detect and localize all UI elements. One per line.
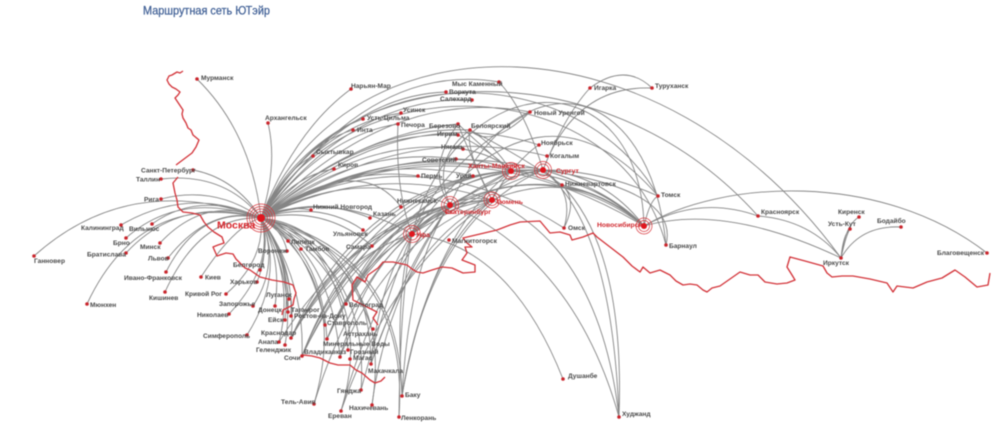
city: Ивано-Франковск bbox=[124, 270, 183, 282]
city: Ленкорань: Ленкорань bbox=[401, 415, 436, 422]
city: Омск: Омск bbox=[568, 225, 586, 232]
city: Киренск bbox=[838, 209, 865, 219]
city: Кишинев: Кишинев bbox=[149, 295, 178, 302]
city: Казань: Казань bbox=[373, 211, 396, 218]
city: Мурманск: Мурманск bbox=[201, 75, 234, 82]
city: Архангельск: Архангельск bbox=[265, 115, 307, 122]
city: Астрахань bbox=[343, 327, 378, 338]
city: Иркутск: Иркутск bbox=[823, 260, 850, 267]
city: Санкт-Петербург: Санкт-Петербург bbox=[141, 166, 196, 174]
city: Таганрог: Таганрог bbox=[291, 307, 320, 314]
city: Таллин: Таллин bbox=[136, 176, 160, 184]
city: Туруханск: Туруханск bbox=[655, 83, 689, 90]
hub: Tyumen bbox=[484, 192, 523, 208]
city: Нижнекамск bbox=[397, 198, 438, 209]
state border bbox=[167, 71, 990, 383]
city: Усть-Кут bbox=[828, 221, 857, 231]
hub: Tyumen: Тюмень bbox=[496, 199, 523, 206]
city: Геленджик bbox=[256, 343, 292, 354]
city: Владикавказ: Владикавказ bbox=[304, 349, 347, 356]
hub: Surgut: Сургут bbox=[556, 168, 579, 175]
routes from Novosibirsk and Irkutsk bbox=[644, 191, 987, 258]
hub: Novosibirsk: Новосибирск bbox=[597, 221, 642, 229]
city: Ростов-на-Дону: Ростов-на-Дону bbox=[294, 313, 346, 320]
hub: Moscow bbox=[217, 204, 275, 232]
hub: Yekaterinburg: Екатеринбург bbox=[445, 208, 491, 216]
city: Николаев: Николаев bbox=[197, 312, 228, 319]
city: Минеральные Воды bbox=[323, 337, 390, 348]
city: Воронеж: Воронеж bbox=[258, 248, 287, 255]
city: Новый Уренгой: Новый Уренгой bbox=[534, 109, 585, 117]
city: Львов: Львов bbox=[148, 256, 169, 262]
city: Тель-Авив: Тель-Авив bbox=[281, 399, 316, 406]
city: Гянджа: Гянджа bbox=[337, 388, 361, 395]
city: Барнаул: Барнаул bbox=[669, 243, 697, 250]
city: Киров bbox=[332, 162, 358, 171]
city: Киев: Киев bbox=[205, 274, 221, 282]
city: Ейск: Ейск bbox=[268, 316, 284, 324]
city: Астрахань: Астрахань bbox=[343, 331, 378, 338]
routes from Ufa bbox=[291, 112, 563, 417]
city: Белгород bbox=[233, 262, 265, 272]
city: Усть-Цильма: Усть-Цильма bbox=[367, 115, 410, 122]
routes from Moscow to the south bbox=[257, 218, 402, 417]
city: Иркутск bbox=[823, 256, 850, 267]
hub: Ufa: Уфа bbox=[416, 232, 430, 239]
city: Киренск: Киренск bbox=[838, 209, 865, 216]
city: Калининград: Калининград bbox=[81, 225, 124, 232]
city: Белоярский: Белоярский bbox=[471, 122, 510, 130]
city: Игрим: Игрим bbox=[437, 131, 458, 138]
city: Самара: Самара bbox=[346, 244, 371, 251]
city: Махачкала: Махачкала bbox=[368, 368, 403, 375]
city: Анапа: Анапа bbox=[258, 339, 278, 346]
city: Ганновер: Ганновер bbox=[34, 258, 65, 265]
city: Салехард: Салехард bbox=[440, 96, 472, 103]
city: Краснодар: Краснодар bbox=[261, 330, 296, 337]
city: Ставрополь: Ставрополь bbox=[327, 320, 367, 327]
city: Донецк: Донецк bbox=[258, 307, 283, 314]
city: Баку: Баку bbox=[405, 392, 421, 399]
city: Худжанд: Худжанд bbox=[622, 411, 651, 418]
city: Нахичевань: Нахичевань bbox=[349, 405, 388, 412]
routes from Moscow to the east and north bbox=[261, 67, 841, 258]
hub: Novosibirsk bbox=[597, 218, 652, 234]
city: Усть-Кут: Усть-Кут bbox=[828, 221, 857, 228]
city: Киров: Киров bbox=[338, 162, 358, 169]
city: Нижнекамск: Нижнекамск bbox=[397, 198, 438, 205]
city: Бодайбо: Бодайбо bbox=[877, 217, 906, 225]
city: Игарка: Игарка bbox=[594, 85, 616, 92]
city: Благовещенск: Благовещенск bbox=[937, 250, 985, 257]
city: Магнитогорск: Магнитогорск bbox=[452, 238, 498, 245]
city: Бодайбо bbox=[877, 217, 906, 229]
city: Печора: Печора bbox=[401, 122, 425, 129]
city: Ноябрьск: Ноябрьск bbox=[541, 139, 573, 147]
city: Томск: Томск bbox=[661, 192, 681, 199]
city: Советский: Советский bbox=[422, 156, 457, 164]
city: Вильнюс bbox=[129, 222, 160, 233]
city: Рига: Рига bbox=[144, 196, 159, 204]
city: Березово: Березово bbox=[429, 123, 460, 130]
city: Луганск: Луганск bbox=[266, 292, 292, 299]
hub: Yekaterinburg bbox=[442, 196, 491, 216]
hub: Moscow: Москва bbox=[217, 220, 255, 232]
city: Нарьян-Мар: Нарьян-Мар bbox=[351, 83, 391, 90]
city: Душанбе bbox=[561, 372, 598, 381]
city: Сыктывкар: Сыктывкар bbox=[316, 149, 354, 156]
city: Пермь: Пермь bbox=[421, 173, 442, 180]
routes from Khanty-Mansiysk bbox=[291, 124, 539, 396]
city: Белоярский bbox=[468, 122, 510, 132]
routes from Yekaterinburg bbox=[279, 124, 619, 417]
city: Братислава: Братислава bbox=[87, 252, 126, 258]
city: Мыс Каменный: Мыс Каменный bbox=[452, 80, 503, 88]
city: Казань bbox=[368, 211, 396, 220]
title: Маршрутная сеть ЮТэйр bbox=[143, 4, 270, 18]
city: Нижний Новгород: Нижний Новгород bbox=[313, 203, 373, 211]
city: Ульяновск: Ульяновск bbox=[333, 231, 368, 238]
city: Урай: Урай bbox=[456, 172, 472, 180]
city: Белгород: Белгород bbox=[233, 262, 265, 269]
city: Усинск: Усинск bbox=[403, 107, 426, 114]
city: Ивано-Франковск: Ивано-Франковск bbox=[124, 275, 183, 282]
city: Ганновер bbox=[32, 254, 65, 265]
city: Сочи: Сочи bbox=[284, 355, 301, 362]
city: Донецк bbox=[258, 304, 283, 314]
city: Нижневартовск: Нижневартовск bbox=[565, 181, 616, 188]
routes from Moscow to the west bbox=[34, 79, 272, 335]
city: Минск bbox=[140, 241, 162, 251]
hub: Khanty-Mansiysk bbox=[468, 162, 525, 180]
routes from Tyumen bbox=[291, 124, 619, 417]
city: Ереван: Ереван bbox=[328, 413, 352, 420]
city: Запорожье: Запорожье bbox=[219, 301, 256, 308]
hub: Ufa bbox=[404, 226, 430, 242]
city: Магас: Магас bbox=[353, 355, 373, 362]
city: Инта: Инта bbox=[357, 127, 373, 134]
city: Воркута: Воркута bbox=[449, 89, 476, 96]
city: Красноярск: Красноярск bbox=[761, 209, 800, 216]
city: Симферополь: Симферополь bbox=[203, 333, 250, 340]
routes from Surgut bbox=[291, 75, 667, 417]
city: Тамбов: Тамбов bbox=[305, 245, 329, 253]
hub: Khanty-Mansiysk: Ханты-Мансийск bbox=[468, 162, 525, 170]
city: Харьков: Харьков bbox=[230, 279, 257, 286]
city: Липецк: Липецк bbox=[291, 239, 315, 246]
city: Минск: Минск bbox=[140, 244, 161, 251]
hub: Surgut bbox=[534, 162, 579, 178]
city: Минеральные Воды: Минеральные Воды bbox=[323, 341, 390, 348]
city: Ереван bbox=[328, 409, 352, 420]
city: Когалым: Когалым bbox=[550, 153, 579, 160]
city: Вильнюс: Вильнюс bbox=[129, 226, 160, 233]
city: Нягань: Нягань bbox=[441, 144, 464, 151]
city: Брно: Брно bbox=[113, 240, 130, 247]
city: Мюнхен: Мюнхен bbox=[90, 302, 116, 309]
city: Геленджик: Геленджик bbox=[256, 347, 292, 354]
city: Кривой Рог: Кривой Рог bbox=[185, 290, 222, 298]
city: Грозный: Грозный bbox=[350, 348, 378, 356]
city: Махачкала bbox=[368, 362, 403, 375]
city: Душанбе: Душанбе bbox=[568, 372, 598, 380]
city: Красноярск bbox=[756, 209, 800, 218]
city: Брно bbox=[113, 236, 130, 247]
city: Кишинев bbox=[149, 290, 178, 302]
city: Волгоград: Волгоград bbox=[349, 302, 384, 309]
